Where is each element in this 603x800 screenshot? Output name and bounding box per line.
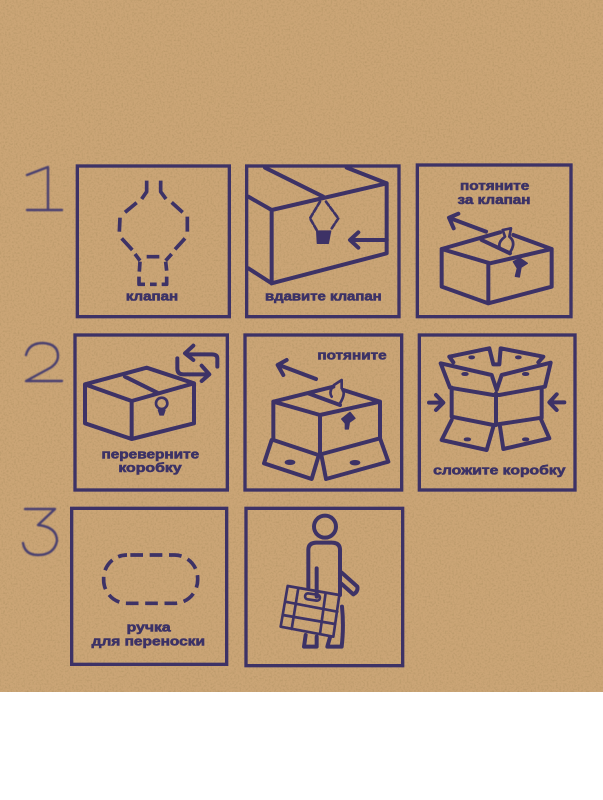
arrow: push left: [350, 232, 387, 248]
panel: pull the valve: [417, 165, 571, 317]
icon: flattening box: [441, 348, 551, 450]
icon: dashed valve: [310, 202, 338, 230]
icon: valve tab: [513, 258, 527, 277]
label: pull: потяните: [317, 348, 387, 362]
arrow: press from left: [429, 395, 443, 410]
arrow: press from right: [549, 394, 564, 410]
arrow: pull: [278, 360, 316, 379]
label: turn the box over: [101, 447, 199, 475]
icon: flap: [499, 228, 513, 252]
heading: pull by the valve: потяните: [460, 179, 529, 193]
number 3: [23, 509, 57, 555]
icon: carried box: [281, 586, 339, 637]
label: press the valve: вдавите клапан: [265, 289, 382, 303]
icon: handle slots: [285, 460, 360, 465]
panel: fold the box: [419, 335, 575, 490]
icon: box with open bottom flaps: [264, 387, 388, 479]
panel: turn the box over: [75, 335, 227, 490]
label: carrying handle: [92, 621, 205, 648]
panel: person carrying box: [246, 508, 403, 666]
number 1: [27, 167, 62, 210]
panel: pull: [245, 335, 402, 490]
panel: press the valve: [247, 166, 399, 317]
label: valve: клапан: [126, 290, 178, 304]
icon: valve: [156, 398, 167, 415]
label: carrying handle: ручка: [127, 621, 172, 635]
label: fold the box: сложите коробку: [433, 464, 565, 478]
icon: hand: [305, 593, 320, 601]
icon: valve tab: [317, 231, 331, 243]
icon: box with open flap: [442, 232, 552, 303]
label: carrying handle: для переноски: [92, 634, 205, 648]
icon: handle slots: [462, 356, 529, 441]
icon: dashed valve outline: [119, 181, 187, 284]
panel: carrying handle: [72, 508, 227, 664]
icon: dashed handle: [104, 555, 198, 603]
icon: box close-up: [248, 168, 387, 283]
heading: pull by the valve: [457, 179, 530, 207]
icon: person: [281, 516, 357, 647]
panel: valve: [77, 166, 229, 317]
icon: closed box: [85, 368, 194, 439]
icon: valve tab: [342, 412, 355, 429]
label: turn the box over: коробку: [118, 461, 182, 475]
step numbers: [23, 167, 62, 555]
label: turn the box over: переверните: [101, 447, 199, 461]
arrow: pull: [449, 214, 486, 232]
arrows: flip: [177, 346, 217, 381]
icon: flap: [330, 380, 344, 404]
number 2: [26, 343, 62, 381]
heading: pull by the valve: за клапан: [457, 193, 530, 207]
